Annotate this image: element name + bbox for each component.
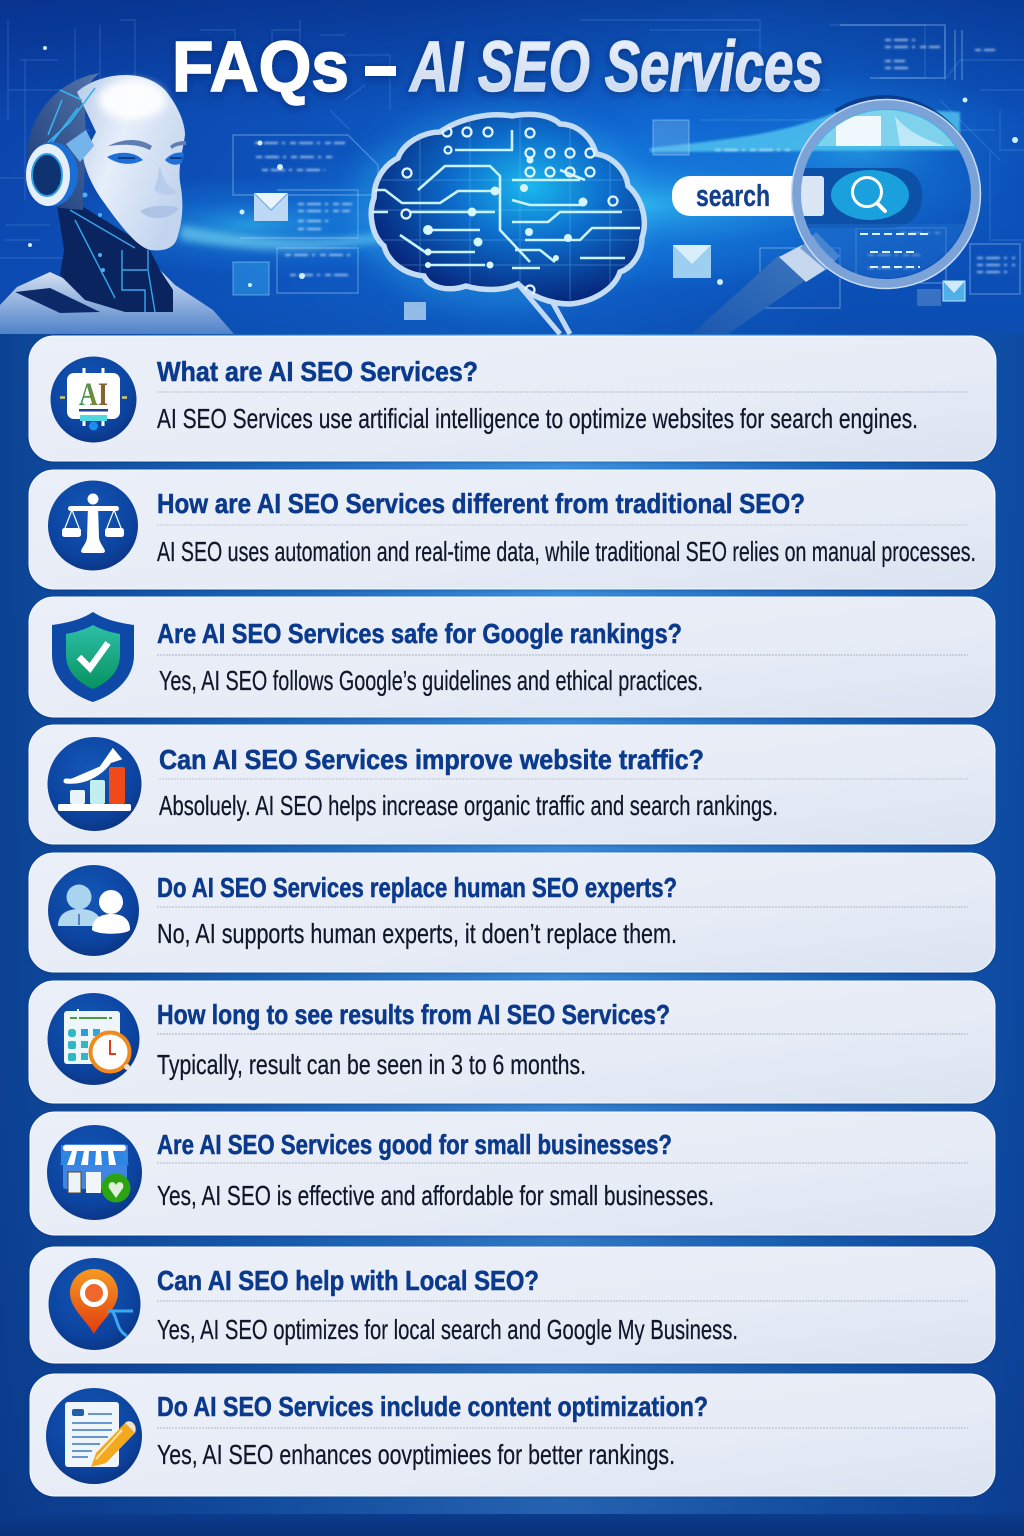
panel: Are AI SEO Services safe for Google rankings?: Yes, AI SEO follows Google’s guidelines and ethical practices. xyxy=(159,665,703,696)
icon: storefront xyxy=(47,1125,142,1220)
panel: Do AI SEO Services include content optimization?: Yes, AI SEO enhances oovptimiees for better rankings. xyxy=(157,1439,675,1470)
panel: Do AI SEO Services replace human SEO experts?: No, AI supports human experts, it doen’t replace them. xyxy=(157,918,677,949)
panel: Can AI SEO help with Local SEO?: Yes, AI SEO optimizes for local search and Google My Business. xyxy=(157,1314,738,1345)
search bar xyxy=(672,168,922,228)
panel: Are AI SEO Services good for small businesses?: Yes, AI SEO is effective and affordable for small businesses. xyxy=(157,1180,714,1211)
panel: How long to see results from AI SEO Services?: Typically, result can be seen in 3 to 6 months. xyxy=(157,1049,586,1080)
icon: shield with check xyxy=(52,612,134,702)
icon: map pin xyxy=(48,1258,140,1350)
title: AI SEO Services xyxy=(409,28,823,107)
hero banner xyxy=(0,0,1024,334)
panel: Are AI SEO Services safe for Google rankings? xyxy=(29,597,995,717)
icon: document and pencil xyxy=(46,1388,142,1484)
panel: Are AI SEO Services good for small businesses?: Are AI SEO Services good for small businesses? xyxy=(157,1129,672,1160)
page background xyxy=(0,330,1024,1536)
panel: Can AI SEO Services improve website traffic? xyxy=(29,725,995,844)
magnifying glass xyxy=(692,98,980,334)
panel: How long to see results from AI SEO Services?: How long to see results from AI SEO Services? xyxy=(157,999,670,1030)
panel: Can AI SEO Services improve website traffic?: Absoluely. AI SEO helps increase organic traffic and search rankings. xyxy=(159,790,778,821)
panel: Are AI SEO Services safe for Google rankings?: Are AI SEO Services safe for Google rankings? xyxy=(157,618,682,649)
icon: growth chart xyxy=(48,737,142,831)
panel: How are AI SEO Services different from traditional SEO?: How are AI SEO Services different from traditional SEO? xyxy=(157,488,805,519)
icon: balance scales xyxy=(48,480,138,570)
icon: envelopes xyxy=(254,193,965,320)
search bar: search xyxy=(696,178,770,213)
icon: calendar and clock xyxy=(48,993,140,1085)
icon: AI chip: AI xyxy=(79,377,108,413)
panel: What are AI SEO Services?: What are AI SEO Services? xyxy=(157,356,478,387)
robot illustration xyxy=(0,73,234,334)
panel: How long to see results from AI SEO Services? xyxy=(29,981,995,1103)
icon: two people xyxy=(48,865,139,956)
panel: Do AI SEO Services replace human SEO experts?: Do AI SEO Services replace human SEO experts? xyxy=(157,872,677,903)
icon: AI chip xyxy=(50,356,136,442)
panel: How are AI SEO Services different from traditional SEO? xyxy=(29,470,995,589)
title: FAQs xyxy=(172,28,349,107)
panel: What are AI SEO Services? xyxy=(29,336,996,461)
panel: Do AI SEO Services replace human SEO experts? xyxy=(29,853,995,972)
panel: Are AI SEO Services good for small businesses? xyxy=(30,1112,995,1235)
panel: Can AI SEO Services improve website traffic?: Can AI SEO Services improve website traffic? xyxy=(159,744,704,775)
panel: Do AI SEO Services include content optimization? xyxy=(30,1374,995,1496)
panel: Do AI SEO Services include content optimization?: Do AI SEO Services include content optimization? xyxy=(157,1391,708,1422)
title xyxy=(172,28,823,107)
brain circuit illustration xyxy=(350,110,650,334)
panel: Can AI SEO help with Local SEO? xyxy=(30,1247,995,1363)
panel: Can AI SEO help with Local SEO?: Can AI SEO help with Local SEO? xyxy=(157,1265,539,1296)
icon: magnifier glyph xyxy=(852,178,885,211)
